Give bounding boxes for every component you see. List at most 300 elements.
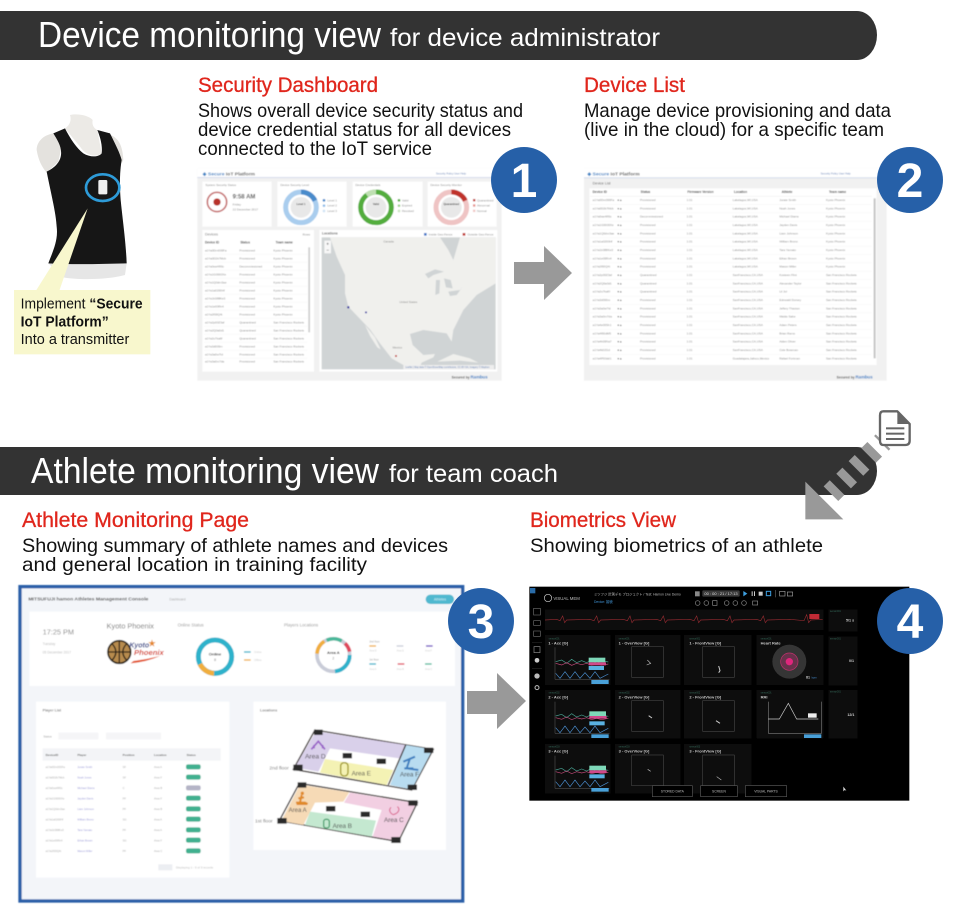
player list card: Jayden Davis xyxy=(77,796,94,800)
row 2 charts: sensor002 xyxy=(619,692,630,695)
player list card: a1Ya1b388Ke3 xyxy=(46,828,64,832)
screenshot: device list: a1Ya3a0w7ld xyxy=(593,306,611,310)
player list card: DeviceID xyxy=(46,753,59,757)
screenshot: device list: San Francisco Rockets xyxy=(826,315,857,319)
floor plan: 2nd floor: 2nd floor xyxy=(269,766,289,772)
screenshot: device list: Michael Diarra xyxy=(779,215,799,219)
online status donut: Offline xyxy=(254,658,262,662)
devices table: a1Ya3d000m xyxy=(205,344,223,348)
arrow: dashboard to device list xyxy=(514,246,572,300)
online status donut xyxy=(198,640,262,673)
screenshot: device list: 1.01 xyxy=(687,223,693,227)
player locations donut: Area A xyxy=(327,650,340,655)
status cards: Quarantined xyxy=(444,202,460,206)
locations floor plan card xyxy=(253,702,446,850)
devices table: San Francisco Rockets xyxy=(273,360,305,364)
summary card: Kyoto Phoenix xyxy=(107,622,154,631)
screenshot: device list: 1.01 xyxy=(687,340,693,344)
ECG strip xyxy=(545,609,823,630)
arrow: athlete page to biometrics xyxy=(467,673,526,729)
player list card: Michael Diarra xyxy=(77,786,95,790)
row 2 charts: 2 - OverView [G] xyxy=(619,695,650,700)
screenshot: device list: Provisioned xyxy=(640,240,656,244)
screenshot: device list: Alexander Taylor xyxy=(779,281,802,285)
header: athlete monitoring view: Athlete monitoring view xyxy=(31,450,380,491)
devices table: Rows xyxy=(303,232,311,236)
screenshot: device list: San Francisco Rockets xyxy=(826,298,857,302)
screenshot: device list: ◈ Secure IoT Platform xyxy=(586,171,640,177)
devices table: San Francisco Rockets xyxy=(273,328,305,332)
player list card: a1Ya2f00Q4t xyxy=(46,849,61,853)
screenshot: device list: ● ▴ xyxy=(617,265,622,269)
screenshot: device list: a1Ya4e00Sh1 xyxy=(593,323,612,327)
number badge 2 xyxy=(877,147,943,213)
toolbar xyxy=(544,590,793,605)
screenshot: device list: 1.01 xyxy=(687,256,693,260)
player list card: a1Ya1a0200Hf xyxy=(46,817,63,821)
row 3 charts: 3 - OverView [G] xyxy=(619,749,650,754)
devices table: Provisioned xyxy=(239,280,255,284)
player list card: William Brono xyxy=(77,817,94,821)
heading: athlete monitoring page: and general location in training facility xyxy=(22,554,367,576)
screenshot: device list: Provisioned xyxy=(640,331,656,335)
bottom buttons: STORED DATA xyxy=(661,789,685,793)
screenshot: device list: Waldo Sabe xyxy=(779,315,796,319)
screenshot: device list: a1Ya2u7ka6f xyxy=(593,290,610,294)
screenshot: device list xyxy=(584,168,887,381)
player list card: PF xyxy=(123,828,126,832)
screenshot: device list: ● ▴ xyxy=(617,198,622,202)
row 2 charts: sensor001 xyxy=(761,692,772,695)
screenshot: device list: Kosteen Flint xyxy=(779,273,797,277)
heading: device list: Device List xyxy=(584,74,685,97)
player list card: C xyxy=(123,786,125,790)
screenshot: device list: Kyoto Phoenix xyxy=(826,215,846,219)
header: athlete monitoring view: for team coach xyxy=(389,460,558,488)
row 2 charts: RRI xyxy=(761,695,768,700)
player list card: Area B xyxy=(154,807,162,811)
vest on mannequin xyxy=(37,114,127,279)
header: device monitoring view: Device monitoring view xyxy=(38,14,382,55)
screenshot: device list: Lil Jul xyxy=(779,290,787,294)
devices table: San Francisco Rockets xyxy=(273,336,305,340)
screenshot: device list: SanFrancisco,CA,USA xyxy=(733,348,763,352)
devices table: Kyoto Phoenix xyxy=(273,256,293,260)
screenshot: device list: a1Ya0Dm000Fa xyxy=(593,198,615,202)
screenshot: device list: Provisioned xyxy=(640,231,656,235)
status cards: Level 3 xyxy=(327,209,337,213)
status cards: 9:58 AM xyxy=(233,194,255,200)
floor plan: 1st floor: 1st floor xyxy=(255,818,273,824)
screenshot: device list: Provisioned xyxy=(640,348,656,352)
player list card: Area F xyxy=(154,775,162,779)
screenshot: device list: Cole Bowman xyxy=(779,348,798,352)
header: device monitoring view xyxy=(0,11,877,60)
screenshot: device list: SanFrancisco,CA,USA xyxy=(733,340,763,344)
devices table: Kyoto Phoenix xyxy=(273,296,293,300)
screenshot: device list: SanFrancisco,CA,USA xyxy=(733,331,763,335)
screenshot: biometrics view xyxy=(529,587,909,801)
devices table: Kyoto Phoenix xyxy=(273,288,293,292)
floor plan: 2nd floor xyxy=(269,730,433,790)
devices table xyxy=(202,230,314,372)
screenshot: device list: Lakelagus,WI,USA xyxy=(733,223,758,227)
devices table: Quarantined xyxy=(239,336,256,340)
screenshot: device list: Location xyxy=(734,190,747,194)
player list card: a1Ya0Dm000Fa xyxy=(46,765,65,769)
heading: security dashboard: Security Dashboard xyxy=(198,74,378,97)
icon: document with data transfer arrow xyxy=(805,411,910,519)
row 1 charts: sensor001 xyxy=(619,637,630,640)
player locations donut: Area A xyxy=(369,668,377,671)
number badge 3: 3 xyxy=(468,596,494,649)
screenshot: device list: Lakelagus,WI,USA xyxy=(733,231,758,235)
summary card: Players Locations xyxy=(284,623,318,628)
summary card: Online Status xyxy=(178,623,204,628)
screenshot: device list: Firmware Version xyxy=(687,190,714,194)
screenshot: device list: Lakelagus,WI,USA xyxy=(733,215,758,219)
status cards: Valid xyxy=(402,198,409,202)
screenshot: device list: 1.01 xyxy=(687,298,693,302)
screenshot: device list: Adam Peters xyxy=(779,323,797,327)
devices table: Status xyxy=(240,241,250,245)
status cards: Device Security Level xyxy=(280,183,309,187)
heading: athlete monitoring page: Athlete Monitoring Page xyxy=(22,509,249,532)
devices table: a1Ya1Q0dm3ae xyxy=(205,280,227,284)
screenshot: device list: 1.01 xyxy=(687,273,693,277)
player list card: Jurate Smith xyxy=(77,765,93,769)
screenshot: device list: Liam Johnson xyxy=(779,231,798,235)
status cards: Level 1 xyxy=(296,202,306,206)
screenshot: device list: ● ▴ xyxy=(617,348,622,352)
screenshot: device list: San Francisco Rockets xyxy=(826,340,857,344)
header: athlete monitoring view xyxy=(0,447,877,495)
header: device monitoring view: for device administrator xyxy=(390,24,660,52)
player list card: Tara Yamato xyxy=(77,828,93,832)
locations map: + xyxy=(326,241,329,246)
devices table: Provisioned xyxy=(239,304,255,308)
screenshot: device list: ● ▴ xyxy=(617,356,622,360)
screenshot: device list: 1.01 xyxy=(687,331,693,335)
player list card: Player List xyxy=(43,709,62,713)
screenshot: device list: SanFrancisco,CA,USA xyxy=(733,290,763,294)
floor plan: 1st floor: Area C xyxy=(384,817,404,824)
heading: biometrics view: Showing biometrics of an athlete xyxy=(530,535,823,557)
devices table: Kyoto Phoenix xyxy=(273,280,293,284)
player list card: Status xyxy=(187,753,196,757)
status cards xyxy=(202,182,497,227)
screenshot: device list: Provisioned xyxy=(640,223,656,227)
screenshot: device list: ● ▴ xyxy=(617,306,622,310)
screenshot: device list: ● ▴ xyxy=(617,223,622,227)
screenshot: device list: 1.01 xyxy=(687,348,693,352)
callout: secure IoT platform: Into a transmitter xyxy=(21,332,130,348)
screenshot: device list: ● ▴ xyxy=(617,290,622,294)
heading: biometrics view xyxy=(530,509,823,557)
number badge 1 xyxy=(491,147,557,213)
screenshot: device list: Provisioned xyxy=(640,248,656,252)
player locations donut: 2nd floor xyxy=(369,639,380,643)
icon: team logo: Kyoto xyxy=(129,643,150,650)
player list card: SG xyxy=(123,838,127,842)
row 1 charts: Heart Rate xyxy=(761,640,781,645)
player locations donut: Area E xyxy=(397,650,404,653)
locations map xyxy=(319,230,497,372)
screenshot: device list: San Francisco Rockets xyxy=(826,348,857,352)
screenshot: device list: 1.01 xyxy=(687,306,693,310)
row 2 charts: 2 - Acc [G] xyxy=(548,695,569,700)
player list card: Noah Jones xyxy=(77,775,92,779)
heading: biometrics view: Biometrics View xyxy=(530,509,677,532)
summary card: 17:25 PM xyxy=(43,627,74,636)
screenshot: device list: Kyoto Phoenix xyxy=(826,198,846,202)
heading: security dashboard xyxy=(198,74,523,160)
floor plan: 2nd floor: Area D xyxy=(305,753,326,760)
callout: secure IoT platform xyxy=(14,208,150,354)
screenshot: device list: Guadalajara,Jalisco,Mexico xyxy=(733,356,769,360)
screenshot: device list: Provisioned xyxy=(640,315,656,319)
screenshot: device list: Lakelagus,WI,USA xyxy=(733,206,758,210)
row 2 charts: 2 - FrontView [G] xyxy=(689,695,722,700)
screenshot: device list: ● ▴ xyxy=(617,231,622,235)
status cards: Expired xyxy=(402,204,412,208)
player list card: a1Ya0sw4R0c xyxy=(46,786,63,790)
status cards: Friday xyxy=(233,203,241,207)
player list card: a1Ya1G0000Xe xyxy=(46,796,65,800)
devices table: a1Ya0D2k7Mcb xyxy=(205,256,226,260)
screenshot: device list: Lakelagus,WI,USA xyxy=(733,248,758,252)
screenshot: athlete monitoring page xyxy=(20,587,463,901)
icon: team logo: Phoenix xyxy=(134,648,165,657)
screenshot: device list: 1.01 xyxy=(687,215,693,219)
screenshot: device list: Lakelagus,WI,USA xyxy=(733,265,758,269)
side readouts: 0/1 xyxy=(849,659,854,663)
screenshot: device list: Kyoto Phoenix xyxy=(826,256,846,260)
screenshot: device list: a1Ya1G0000Xe xyxy=(593,223,614,227)
screenshot: device list: SanFrancisco,CA,USA xyxy=(733,273,763,277)
status cards: Valid xyxy=(373,202,379,206)
screenshot: device list: 1.01 xyxy=(687,281,693,285)
floor plan: 1st floor: Area A xyxy=(289,808,307,814)
screenshot: device list: Secured by Rambus xyxy=(837,374,873,379)
row 3 charts: 3 - Acc [G] xyxy=(548,749,569,754)
row 2 charts: sensor002 xyxy=(689,692,701,695)
status cards: System Security Status xyxy=(205,183,237,187)
left sidebar icons xyxy=(532,608,542,690)
devices table: a1Ya1a0200Hf xyxy=(205,288,225,292)
player locations donut: Area F xyxy=(425,650,433,653)
devices table: Provisioned xyxy=(239,248,255,252)
screenshot: device list: a1Ya1b388Ke3 xyxy=(593,248,613,252)
floor plan: 1st floor: Area B xyxy=(333,823,352,830)
screenshot: device list: SanFrancisco,CA,USA xyxy=(733,315,763,319)
screenshot: device list: a1Ya2f00Q4t xyxy=(593,265,610,269)
number badge 4 xyxy=(877,588,943,654)
screenshot: device list: Lakelagus,WI,USA xyxy=(733,240,758,244)
screenshot: device list: Quarantined xyxy=(640,281,657,285)
row 2 charts: sensor002 xyxy=(549,692,560,695)
devices table: Kyoto Phoenix xyxy=(273,264,293,268)
devices table: a1Ya1e00Rn4 xyxy=(205,304,224,308)
screenshot: device list: Kyoto Phoenix xyxy=(826,206,846,210)
heading: security dashboard: Shows overall device security status and xyxy=(198,100,523,122)
screenshot: security dashboard: Secured by Rambus xyxy=(452,374,488,379)
status cards: Device Credentials xyxy=(355,183,381,187)
heading: device list: (live in the cloud) for a specific team xyxy=(584,119,884,141)
number badge 1: 1 xyxy=(511,155,537,208)
player locations donut: Area D xyxy=(369,650,377,653)
screenshot: device list: Security Policy User Help xyxy=(821,172,851,176)
side readouts: sensor001 xyxy=(830,610,842,613)
player list card: Location xyxy=(154,753,167,757)
side readouts: 12/1 xyxy=(847,713,854,717)
player list card: Area A xyxy=(154,828,162,832)
devices table: Devices xyxy=(205,232,218,236)
screenshot: security dashboard xyxy=(197,168,502,381)
player list card xyxy=(36,702,229,878)
screenshot: device list: Decommissioned xyxy=(640,215,663,219)
devices table: Kyoto Phoenix xyxy=(273,304,293,308)
devices table: Device ID xyxy=(205,241,219,245)
screenshot: device list: a1Ya3a0m7da xyxy=(593,315,612,319)
screenshot: device list: ● ▴ xyxy=(617,298,622,302)
devices table: San Francisco Rockets xyxy=(273,344,305,348)
screenshot: device list: Provisioned xyxy=(640,323,656,327)
screenshot: device list: Noah Jones xyxy=(779,206,796,210)
floor plan: 2nd floor: Area E xyxy=(352,770,371,777)
player list card: Area C xyxy=(154,849,162,853)
screenshot: device list: Rafael Fortman xyxy=(779,356,800,360)
player list card: PF xyxy=(123,849,126,853)
screenshot: device list: SanFrancisco,CA,USA xyxy=(733,298,763,302)
screenshot: device list: 1.01 xyxy=(687,265,693,269)
screenshot: device list: a1Ya2Q0a0d1 xyxy=(593,281,612,285)
screenshot: device list: ● ▴ xyxy=(617,273,622,277)
screenshot: device list: San Francisco Rockets xyxy=(826,290,857,294)
player list card: a1Ya0D2k7Mcb xyxy=(46,775,65,779)
player list card: Area F xyxy=(154,796,162,800)
devices table: Provisioned xyxy=(239,296,255,300)
screenshot: device list: Kyoto Phoenix xyxy=(826,265,846,269)
number badge 3 xyxy=(448,588,514,654)
heading: device list xyxy=(584,74,891,141)
heading: athlete monitoring page: Showing summary of athlete names and devices xyxy=(22,535,448,557)
screenshot: device list: San Francisco Rockets xyxy=(826,306,857,310)
screenshot: device list: Provisioned xyxy=(640,206,656,210)
screenshot: device list: a1Ya1Q0dm3ae xyxy=(593,231,615,235)
screenshot: device list: ● ▴ xyxy=(617,240,622,244)
status cards: Quarantined xyxy=(477,198,494,202)
screenshot: security dashboard: ◈ Secure IoT Platform xyxy=(202,171,256,177)
player list card: Area F xyxy=(154,838,162,842)
screenshot: device list: Jurate Smith xyxy=(779,198,796,202)
floor plan: 1st floor xyxy=(255,782,418,843)
screenshot: device list: a1Ya0sw4R0c xyxy=(593,215,612,219)
devices table: Decommissioned xyxy=(239,264,263,268)
screenshot: device list: a1Ya2p00Z3af xyxy=(593,273,612,277)
bottom buttons xyxy=(652,786,787,797)
player list card: SG xyxy=(123,817,127,821)
devices table: Provisioned xyxy=(239,360,255,364)
devices table: a1Ya1b388Ke3 xyxy=(205,296,226,300)
screenshot: device list: Team name xyxy=(829,190,846,194)
player locations donut xyxy=(317,639,433,671)
status cards: Level 2 xyxy=(327,204,337,208)
devices table: a1Ya2p00Z3af xyxy=(205,320,225,324)
status cards: Abnormal xyxy=(477,204,490,208)
player list card: Position xyxy=(123,753,135,757)
screenshot: device list: San Francisco Rockets xyxy=(826,281,857,285)
player locations donut: Area C xyxy=(425,668,433,671)
locations map: United States xyxy=(399,300,418,304)
screenshot: device list: a1Ya4P00dd1 xyxy=(593,356,612,360)
devices table: Provisioned xyxy=(239,352,255,356)
row 2 charts xyxy=(545,690,823,738)
devices table: a1Ya2Q0a0d1 xyxy=(205,328,224,332)
screenshot: device list: ● ▴ xyxy=(617,248,622,252)
heading: athlete monitoring page xyxy=(22,509,448,576)
screenshot: device list: Lakelagus,WI,USA xyxy=(733,256,758,260)
row 1 charts: 81 xyxy=(806,675,810,679)
devices table: Provisioned xyxy=(239,288,255,292)
screenshot: athlete monitoring page: Athletes xyxy=(434,598,446,602)
row 3 charts: 3 - FrontView [G] xyxy=(689,749,722,754)
screenshot: device list: William Brono xyxy=(779,240,798,244)
player locations donut: 2 xyxy=(332,656,334,660)
number badge 2: 2 xyxy=(897,155,923,208)
player locations donut: Area B xyxy=(397,668,404,671)
callout: secure IoT platform: Implement “Secure xyxy=(21,296,143,312)
player list card: Area B xyxy=(154,786,162,790)
screenshot: device list: ● ▴ xyxy=(617,323,622,327)
player list card: Displaying 1 - 9 of 9 records xyxy=(176,866,214,870)
devices table: Quarantined xyxy=(239,328,256,332)
player list card: PF xyxy=(123,807,126,811)
devices table: San Francisco Rockets xyxy=(273,352,305,356)
toolbar: 00 : 00 : 21 / 17:13 xyxy=(704,591,738,596)
screenshot: device list: Device List xyxy=(593,182,611,186)
screenshot: device list: ● ▴ xyxy=(617,331,622,335)
screenshot: device list: San Francisco Rockets xyxy=(826,331,857,335)
devices table: Kyoto Phoenix xyxy=(273,312,293,316)
summary card: Tuesday xyxy=(43,642,56,646)
player locations donut: 1st floor xyxy=(369,657,379,661)
screenshot: device list: Kyoto Phoenix xyxy=(826,231,846,235)
player list card: Mason Miller xyxy=(77,849,93,853)
floor plan: 2nd floor: Area F xyxy=(400,771,419,778)
row 1 charts: sensor001 xyxy=(761,637,772,640)
screenshot: device list: 1.01 xyxy=(687,356,693,360)
screenshot: device list: Aiden Oliver xyxy=(779,340,796,344)
screenshot: device list: Quarantined xyxy=(640,273,657,277)
locations floor plan card: Locations xyxy=(260,709,277,713)
locations map: − xyxy=(326,248,329,253)
screenshot: device list: Provisioned xyxy=(640,306,656,310)
screenshot: athlete monitoring page: MITSUFUJI hamon Athletes Management Console xyxy=(28,597,149,603)
screenshot: device list: 1.01 xyxy=(687,240,693,244)
online status donut: Online xyxy=(209,652,222,657)
player list card: Ethan Brown xyxy=(77,838,93,842)
screenshot: device list: 1.01 xyxy=(687,206,693,210)
locations map: Leaflet | Map data © OpenStreetMap contributors, CC-BY-SA, Imagery © Mapbox xyxy=(405,366,490,369)
icon: team logo xyxy=(108,639,165,663)
screenshot: device list: 1.01 xyxy=(687,315,693,319)
icon: team logo: ★ xyxy=(148,639,156,648)
screenshot: security dashboard: Security Policy User Help xyxy=(436,172,466,176)
heading: device list: Manage device provisioning and data xyxy=(584,100,891,122)
status cards: 22 December 2017 xyxy=(233,207,258,211)
screenshot: device list: 1.01 xyxy=(687,248,693,252)
